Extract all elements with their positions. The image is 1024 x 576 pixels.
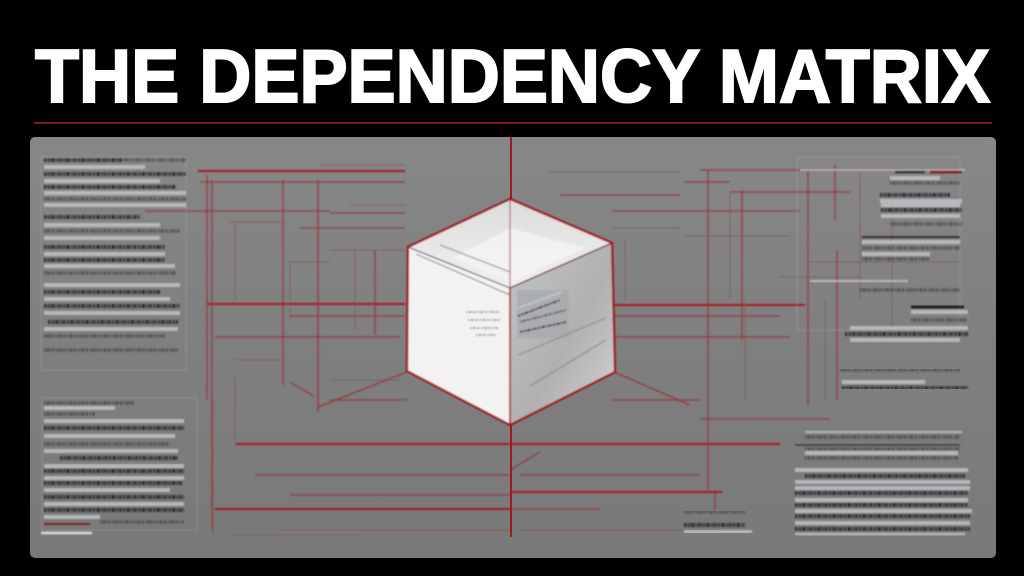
cube right face bbox=[510, 243, 615, 425]
central vertical axis line bbox=[510, 137, 512, 537]
text block: bottom centre right bbox=[684, 512, 752, 532]
icon: central cube bbox=[407, 199, 615, 425]
cube top ridge bbox=[509, 199, 511, 288]
cube face label: left bbox=[466, 312, 500, 335]
dependency lines: left side bbox=[145, 165, 510, 535]
title divider rule bbox=[34, 122, 992, 124]
text block: lower right bbox=[795, 432, 972, 534]
text block: middle right bbox=[840, 370, 968, 388]
dependency lines: right side bbox=[510, 165, 960, 530]
cube left face bbox=[407, 247, 510, 425]
cube inner top highlight bbox=[452, 228, 585, 282]
panel: dependency matrix diagram bbox=[30, 137, 996, 558]
cube face label: right bbox=[517, 290, 569, 338]
cube outline bbox=[407, 199, 615, 425]
title: THE DEPENDENCY MATRIX bbox=[35, 34, 990, 118]
text block: lower left bbox=[41, 398, 197, 533]
text block: upper left bbox=[41, 157, 186, 370]
cube top face bbox=[408, 199, 612, 288]
text block: upper right bbox=[797, 157, 968, 340]
